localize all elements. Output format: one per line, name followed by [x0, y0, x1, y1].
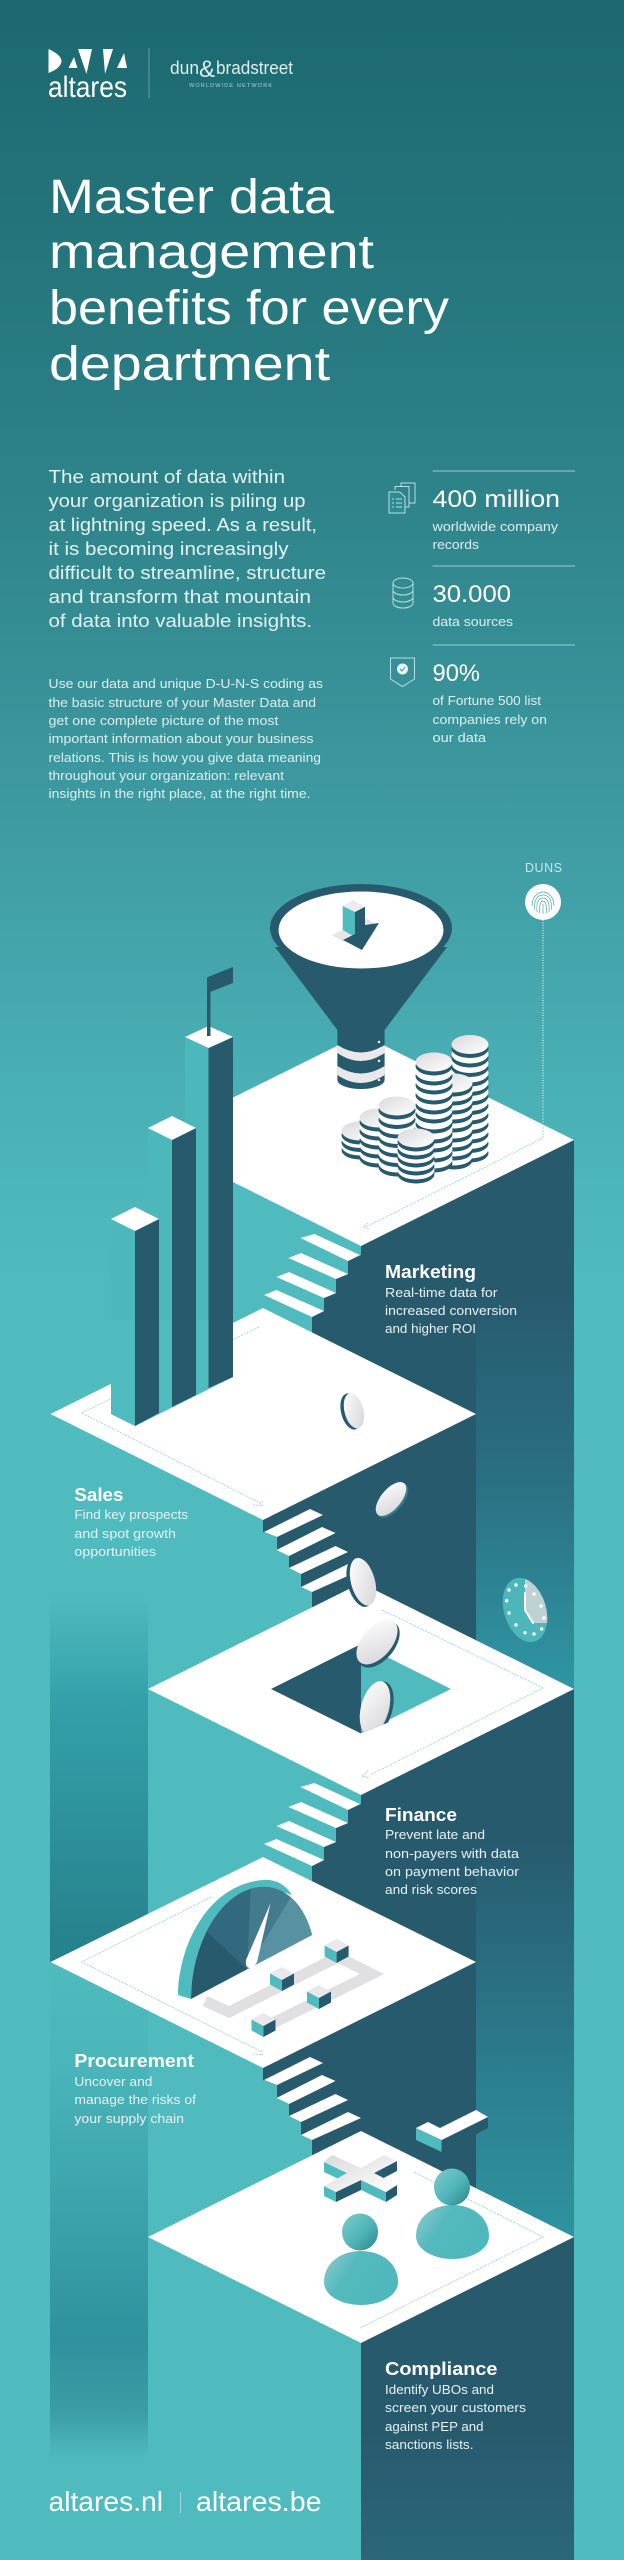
stat: 90% — [432, 660, 547, 745]
secondary paragraph — [48, 676, 324, 801]
icon: fingerprint — [525, 884, 561, 920]
label: procurement: your supply chain — [74, 2111, 184, 2126]
footer links — [48, 2486, 322, 2517]
funnel bands — [337, 1045, 385, 1083]
gauge rim — [178, 1880, 292, 1999]
logo: altares: altares — [48, 71, 127, 104]
label: compliance: screen your customers — [385, 2400, 527, 2415]
stat: 90%: of Fortune 500 list — [432, 693, 541, 708]
label: finance: and risk scores — [385, 1882, 478, 1897]
stat: 30.000: data sources — [432, 614, 514, 629]
logo: dun and bradstreet: & — [199, 56, 215, 83]
clock hands — [525, 1593, 533, 1623]
label: finance: non-payers with data — [385, 1846, 520, 1861]
stairs: marketing — [264, 1234, 360, 1317]
clock — [502, 1578, 548, 1642]
icon: person back — [416, 2168, 489, 2259]
logo: dun and bradstreet: WORLDWIDE NETWORK — [189, 83, 272, 89]
secondary paragraph: get one complete picture of the most — [48, 713, 279, 728]
stat: 400 million — [431, 486, 560, 552]
stat: 30.000: 30.000 — [432, 581, 511, 608]
stairs: procurement — [264, 2057, 361, 2140]
intro paragraph: at lightning speed. As a result, — [48, 515, 317, 535]
label: finance: on payment behavior — [385, 1864, 520, 1879]
stat: 400 million: 400 million — [432, 486, 560, 513]
stack C — [436, 1074, 472, 1170]
logo: DATA shapes — [48, 49, 127, 74]
platform: marketing — [233, 1034, 574, 1246]
secondary paragraph: important information about your business — [48, 731, 314, 746]
logo block — [48, 49, 293, 104]
stat: 30.000 — [432, 581, 514, 629]
gauge track — [205, 1957, 372, 2028]
label: compliance: sanctions lists. — [385, 2437, 474, 2452]
coin stacks — [342, 1035, 488, 1184]
footer links: altares.nl — [48, 2486, 163, 2517]
icon: documents — [389, 483, 415, 513]
stack B — [416, 1052, 452, 1172]
platform: procurement — [50, 1857, 476, 2068]
label: finance: Finance — [385, 1805, 457, 1825]
title: department — [49, 338, 330, 391]
bar 1 — [111, 1207, 159, 1426]
label: marketing: Real-time data for — [385, 1285, 498, 1300]
gauge wedges — [191, 1886, 312, 1999]
icon: person front — [324, 2214, 398, 2305]
dark tower base — [361, 2237, 574, 2560]
label: compliance: Compliance — [385, 2359, 497, 2379]
label: compliance — [385, 2359, 527, 2452]
coin over hole — [348, 1612, 408, 1675]
title: benefits for every — [49, 282, 449, 335]
label: marketing: increased conversion — [385, 1303, 517, 1318]
stats panel — [389, 471, 575, 745]
coin falling on tower — [370, 1476, 414, 1523]
secondary paragraph: throughout your organization: relevant — [48, 768, 284, 783]
platform: compliance — [148, 2131, 574, 2343]
label: compliance: Identify UBOs and — [385, 2382, 494, 2397]
stat: 400 million: records — [432, 537, 480, 552]
label: sales: Sales — [74, 1485, 123, 1505]
title: Master data — [49, 171, 334, 224]
dark tower upper — [263, 1140, 476, 1700]
icon: down arrow — [332, 900, 379, 950]
footer links: altares.be — [196, 2486, 322, 2517]
stack E — [360, 1108, 396, 1168]
teal left faces — [148, 1182, 361, 2560]
DUNS dotted connector — [542, 920, 544, 1100]
bar chart with flag — [111, 967, 233, 1426]
icon: check mark — [416, 2110, 488, 2152]
intro paragraph: your organization is piling up — [48, 491, 306, 511]
bar left faces — [111, 1037, 208, 1426]
label: marketing: and higher ROI — [385, 1321, 476, 1336]
label: procurement — [74, 2051, 196, 2126]
stairs: sales — [264, 1509, 361, 1592]
bar 3 — [185, 1026, 233, 1388]
stack D — [378, 1096, 416, 1176]
label: sales: and spot growth — [74, 1526, 176, 1541]
stack G — [398, 1128, 434, 1184]
intro paragraph: it is becoming increasingly — [48, 539, 288, 559]
label: compliance: against PEP and — [385, 2419, 484, 2434]
shaded left column lower — [50, 1962, 148, 2460]
secondary paragraph: the basic structure of your Master Data and — [48, 695, 316, 710]
label: procurement: Procurement — [74, 2051, 194, 2071]
funnel — [270, 884, 452, 1089]
icon: shield — [390, 658, 414, 686]
clock dots — [505, 1583, 546, 1636]
stack F — [342, 1122, 378, 1160]
coin inside hole — [360, 1681, 394, 1732]
logo: dun and bradstreet — [170, 56, 293, 89]
stat: 90%: our data — [432, 730, 487, 745]
intro paragraph — [48, 467, 326, 631]
stat: 400 million: worldwide company — [431, 519, 559, 534]
dark tower lower — [263, 1689, 476, 2250]
coin at stairs — [342, 1554, 381, 1610]
platform: sales — [50, 1308, 476, 1520]
logo: dun and bradstreet: bradstreet — [216, 58, 293, 78]
label: sales: Find key prospects — [74, 1507, 189, 1522]
intro paragraph: difficult to streamline, structure — [48, 563, 326, 583]
intro paragraph: and transform that mountain — [48, 587, 311, 607]
gauge — [178, 1880, 320, 2005]
secondary paragraph: insights in the right place, at the right time. — [48, 786, 310, 801]
gauge cubes — [252, 1939, 349, 2037]
gauge needle — [246, 1903, 271, 1968]
icon: database — [393, 578, 413, 608]
intro paragraph: The amount of data within — [48, 467, 285, 487]
shaded left column upper — [50, 1414, 148, 1964]
icon: cross mark — [324, 2155, 397, 2202]
label: marketing: Marketing — [385, 1262, 476, 1282]
DUNS label: DUNS — [525, 861, 562, 875]
stat: 90%: 90% — [432, 660, 480, 687]
title: management — [49, 226, 374, 279]
stack A — [452, 1035, 488, 1162]
bar 2 — [148, 1116, 196, 1407]
shaded right column lower — [476, 1689, 574, 2249]
secondary paragraph: Use our data and unique D-U-N-S coding as — [48, 676, 324, 691]
secondary paragraph: relations. This is how you give data meaning — [48, 750, 321, 765]
platform: finance — [148, 1583, 574, 1795]
flag — [207, 967, 233, 1036]
stairs: finance — [264, 1783, 360, 1866]
clock wedge — [525, 1579, 548, 1623]
label: finance: Prevent late and — [385, 1827, 485, 1842]
label: sales — [74, 1485, 189, 1559]
inner path lines — [82, 1100, 543, 2328]
label: finance — [385, 1805, 520, 1897]
label: procurement: Uncover and — [74, 2074, 152, 2089]
intro paragraph: of data into valuable insights. — [48, 611, 312, 631]
label: marketing — [385, 1262, 517, 1336]
stat: 90%: companies rely on — [432, 712, 547, 727]
hole in finance platform — [271, 1620, 451, 1734]
label: procurement: manage the risks of — [74, 2092, 196, 2107]
label: sales: opportunities — [74, 1544, 157, 1559]
title — [49, 171, 449, 391]
coin falling on platform — [337, 1391, 368, 1432]
shaded right column upper — [476, 1140, 574, 1700]
logo: dun and bradstreet: dun — [170, 58, 199, 78]
